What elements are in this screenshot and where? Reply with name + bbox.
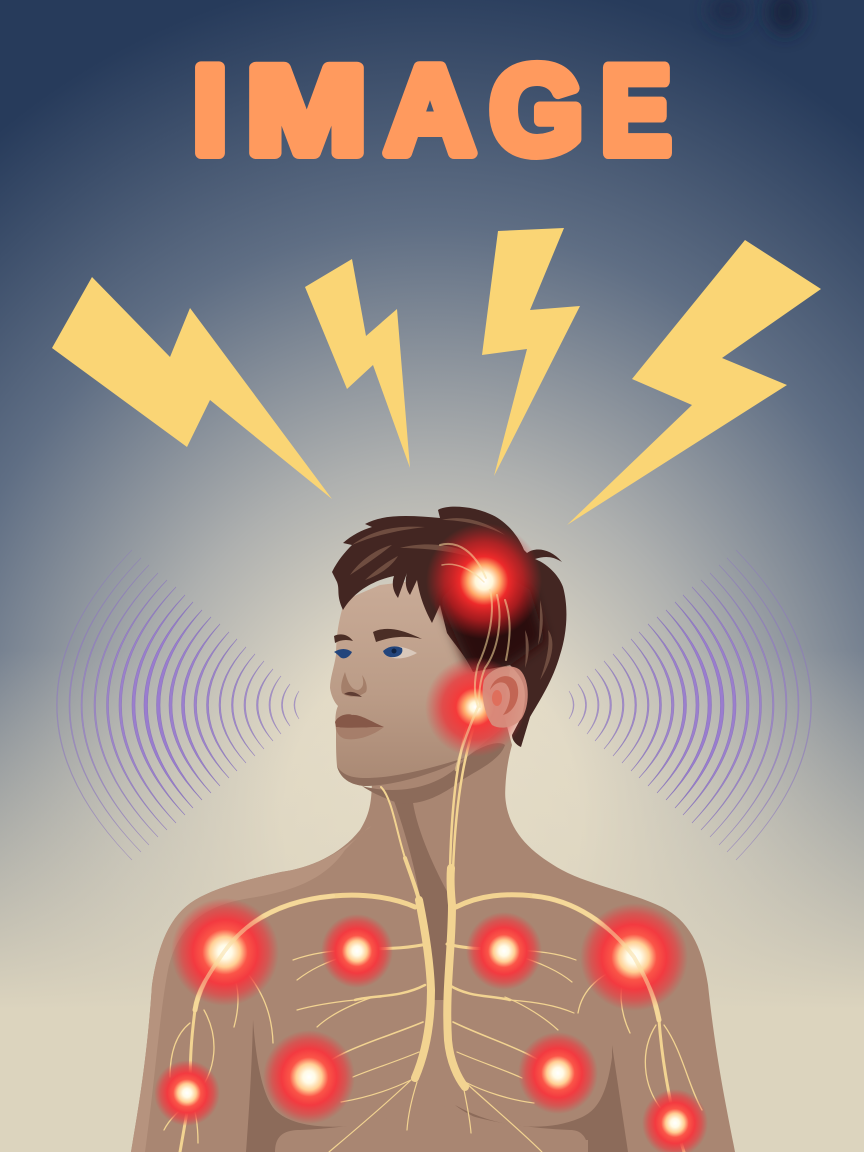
spinal nerve right bbox=[447, 868, 465, 1087]
figure bbox=[131, 507, 735, 1152]
glow: right chest bbox=[466, 912, 542, 990]
arm branches left bbox=[164, 960, 273, 1143]
left eye bbox=[334, 649, 352, 658]
glow: left chest bbox=[321, 914, 393, 988]
glow: left shoulder bbox=[171, 898, 279, 1006]
right side shadow bbox=[455, 1050, 613, 1152]
face and neck bbox=[372, 700, 512, 810]
bolt 1 bbox=[52, 277, 332, 499]
left side shadow bbox=[246, 1020, 425, 1152]
glow: right shoulder bbox=[580, 903, 688, 1011]
ear bbox=[483, 666, 528, 728]
glow: right forearm bbox=[642, 1089, 708, 1152]
neck under jaw shadow bbox=[362, 743, 505, 803]
title: E bbox=[601, 42, 671, 180]
left eyebrow bbox=[334, 634, 353, 643]
mouth bbox=[335, 714, 384, 739]
sound waves left bbox=[56, 550, 299, 860]
lightning bolts bbox=[52, 228, 821, 525]
nerve highlights over glows bbox=[195, 544, 659, 1020]
title bbox=[193, 42, 671, 180]
nostril bbox=[344, 692, 362, 697]
pain glows bbox=[154, 523, 708, 1152]
left shoulder nerve bbox=[195, 896, 333, 1010]
title: G bbox=[490, 42, 583, 180]
jaw nerves bbox=[456, 707, 478, 770]
scalp nerves bbox=[475, 590, 492, 707]
bolt 2 bbox=[305, 259, 410, 468]
nose shadow bbox=[341, 672, 367, 697]
arm crease right bbox=[612, 1045, 628, 1152]
torso shading bbox=[246, 765, 628, 1152]
right eyebrow bbox=[373, 629, 422, 642]
cheek shading bbox=[337, 758, 465, 786]
neck shadow bbox=[385, 765, 462, 1000]
nerves bbox=[164, 712, 702, 1152]
sound waves right bbox=[569, 550, 812, 860]
rib nerves right bbox=[447, 944, 576, 1152]
right shoulder nerve bbox=[534, 896, 659, 1020]
right clavicle and arm nerve bbox=[456, 895, 659, 1020]
hair bbox=[332, 507, 566, 747]
glow: left forearm bbox=[154, 1060, 220, 1126]
spinal nerve left bbox=[415, 900, 431, 1078]
right neck nerves bbox=[450, 712, 472, 870]
rib nerves left bbox=[293, 944, 427, 1152]
bolt 4 bbox=[567, 240, 821, 525]
spinal nerve left upper bbox=[381, 787, 405, 858]
bolt 3 bbox=[482, 228, 580, 476]
glow: scalp bbox=[426, 523, 542, 639]
title: A bbox=[385, 42, 475, 180]
arm branches right bbox=[578, 965, 702, 1110]
torso bbox=[131, 740, 735, 1152]
face bbox=[330, 580, 510, 786]
hair highlights bbox=[350, 518, 552, 680]
right eye bbox=[383, 646, 417, 658]
left clavicle and arm nerve bbox=[195, 895, 415, 1010]
abdomen bbox=[275, 1100, 588, 1152]
title: M bbox=[246, 42, 366, 180]
shoulder highlight left bbox=[131, 826, 372, 1152]
glow: left lower rib bbox=[263, 1030, 355, 1124]
glow: jaw bbox=[425, 657, 525, 757]
glow: right lower rib bbox=[518, 1032, 598, 1114]
title: I bbox=[193, 42, 227, 180]
